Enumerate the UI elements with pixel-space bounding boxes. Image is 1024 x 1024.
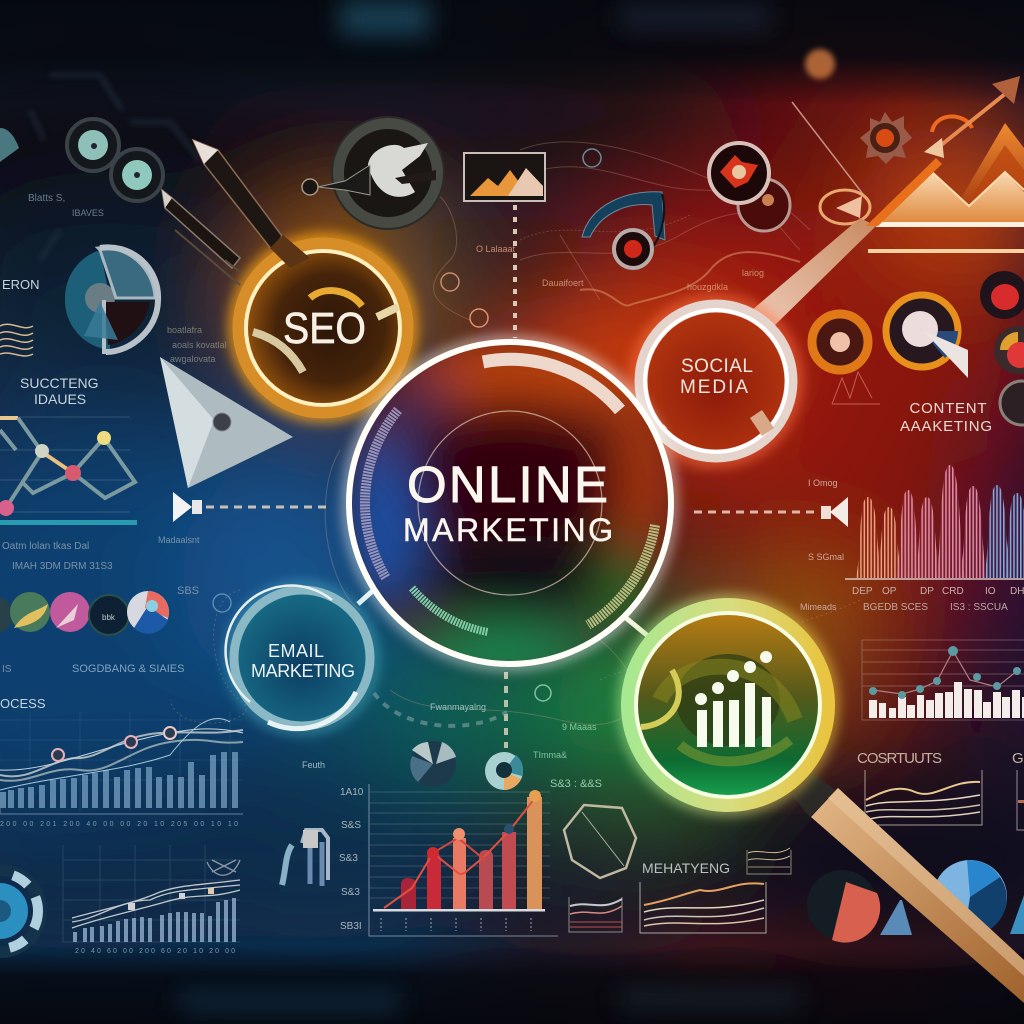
icon: spiky sun gear (860, 112, 912, 164)
bottom centre chart: 1A10 (340, 787, 364, 798)
node: social media (636, 301, 796, 461)
text: content marketing: CONTENT (910, 400, 986, 417)
node: online marketing: ONLINE (407, 456, 608, 513)
waveform chart: CRD (942, 586, 964, 597)
icon row: coloured pies (0, 591, 169, 635)
dashed connector top (513, 205, 517, 338)
faint dark grid strokes (30, 75, 200, 260)
text: left side labels: IDAUES (34, 391, 86, 407)
waveform chart: Mimeads (800, 602, 837, 612)
text: left side labels: Blatts S, (28, 193, 65, 204)
bottom centre chart: S&S (341, 820, 361, 831)
text: small left rows: IS (2, 664, 12, 675)
text: small left rows (2, 535, 200, 675)
dashed connector bottom (374, 672, 507, 748)
small map annotations (167, 244, 764, 364)
icon: gauge (582, 192, 665, 268)
text: left side labels: OCESS (0, 696, 46, 711)
bottom centre chart: S&3 (339, 853, 358, 864)
waveform chart: BGEDB SCES (863, 602, 928, 613)
chart: bottom left bars: 20 40 60 00 200 60 20 10 20 00 (75, 948, 235, 955)
text: bottom centre small (302, 702, 602, 790)
text: left side labels (0, 193, 184, 711)
right bar chart (862, 640, 1024, 720)
waveform chart: S SGmal (808, 552, 844, 562)
faint sketch near content marketing (832, 372, 880, 404)
node: SEO: SEO (283, 304, 366, 353)
text: small left rows: Madaalsnt (158, 535, 200, 545)
icon row: coloured pies: bbk (102, 613, 116, 622)
icon: pens (162, 140, 310, 285)
node: online marketing: MARKETING (403, 512, 613, 548)
text: right labels (857, 750, 1024, 767)
line chart: succeeding ideas (0, 417, 137, 525)
waveform chart: IO (985, 586, 996, 597)
icon: target rings (812, 271, 1024, 425)
icon: wave chip left (0, 324, 33, 356)
connector spokes (358, 420, 676, 636)
bottom centre chart: SB3I (340, 921, 362, 932)
right arrow dashed (694, 497, 848, 527)
growth mountains and arrow (752, 76, 1024, 326)
chart: process bars (0, 712, 243, 828)
small map annotations: O Lalaaat (476, 244, 516, 254)
icon: paper plane (160, 357, 293, 488)
small outlined nodes (213, 149, 601, 701)
small map annotations: awgalovata (170, 354, 216, 364)
text: small left rows: IMAH 3DM DRM 31S3 (12, 561, 113, 572)
icon: red gear lens (709, 143, 790, 231)
faint map lines (170, 142, 860, 725)
icon: segmented semi pie (65, 247, 158, 354)
text: left side labels: SUCCTENG (20, 375, 99, 391)
waveform chart: IS3 : SSCUA (950, 602, 1008, 613)
text: bottom centre small: TImma& (533, 750, 567, 760)
chart: process bars: 200 00 201 200 40 00 00 20 10 205 00 10 10 (0, 821, 238, 828)
text: content marketing: AAAKETING (900, 418, 992, 435)
icon: left edge gem (0, 128, 19, 162)
chart: bottom left bars (63, 845, 240, 955)
mini chart panels (569, 848, 791, 933)
waveform chart: OP (882, 586, 897, 597)
text: bottom centre small: Fwanmayalng (430, 702, 486, 712)
waveform chart (800, 465, 1024, 613)
small map annotations: Dauaifoert (542, 278, 584, 288)
small map annotations: boatlafra (167, 325, 202, 335)
text: left side labels: IBAVES (72, 208, 104, 218)
node: online marketing (340, 332, 680, 683)
icon: mini mountain chart (464, 153, 545, 201)
magnifying glass (624, 601, 1024, 1003)
text: metering label: MEHATYENG (642, 860, 730, 876)
faint orange map contour (580, 252, 800, 306)
icon: globe dial (302, 117, 444, 229)
icon: twin lens dials (67, 119, 163, 201)
waveform chart: DEP (852, 586, 873, 597)
node: SEO (235, 240, 411, 416)
text: left side labels: SOGDBANG & SIAIES (72, 663, 184, 675)
text: content marketing (900, 400, 992, 435)
text: small left rows: SBS (177, 585, 199, 597)
icon: stylised figures (282, 830, 328, 886)
text: bottom centre small: S&3 : &&S (550, 778, 602, 790)
small map annotations: houzgdkla (687, 282, 728, 292)
text: bottom centre small: 9 Maaas (562, 722, 597, 732)
node: social media: SOCIAL (681, 356, 753, 377)
icon: pie and donut (410, 741, 523, 790)
node: email marketing: EMAIL (268, 641, 324, 661)
text: right labels: G (1012, 750, 1024, 767)
bottom centre chart: S&3 (341, 887, 360, 898)
left arrow dashed (173, 492, 332, 522)
waveform chart: DP (920, 586, 934, 597)
node: email marketing (226, 586, 374, 730)
small map annotations: lariog (742, 268, 764, 278)
text: right labels: COSRTUUTS (857, 750, 942, 767)
text: bottom centre small: Feuth (302, 760, 325, 770)
icon: octagon compass (564, 805, 636, 878)
waveform chart: I Omog (808, 478, 838, 488)
bottom right pies (807, 860, 1024, 943)
node: email marketing: MARKETING (251, 661, 355, 681)
bottom centre chart (339, 784, 558, 936)
icon: bottom left wheel (0, 870, 41, 952)
chart: costs mini (865, 770, 1024, 830)
small map annotations: aoals kovatlal (172, 340, 227, 350)
text: left side labels: ERON (2, 277, 40, 292)
text: small left rows: Oatm lolan tkas Dal (2, 541, 89, 552)
node: social media: MEDIA (680, 377, 748, 398)
